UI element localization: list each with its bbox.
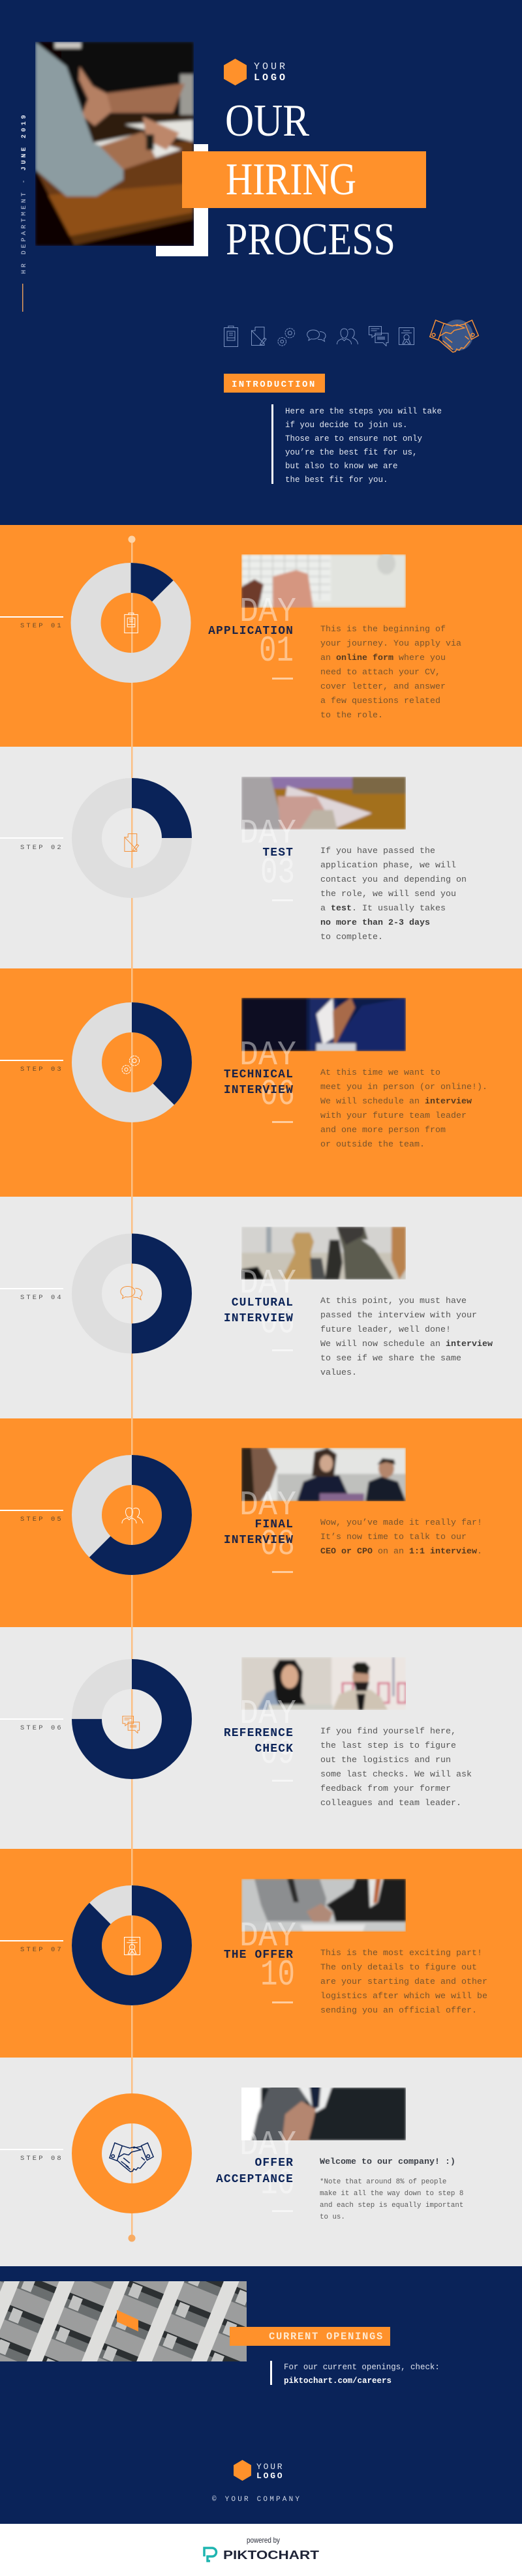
step 2 text: If you have passed the [320, 846, 435, 856]
title: PROCESS [226, 215, 395, 265]
step 5 text: Wow, you’ve made it really far! [320, 1518, 482, 1528]
step 2 donut: two eighths [87, 793, 177, 883]
introduction text [271, 404, 447, 485]
step 3 day count [239, 1036, 296, 1123]
step 7 heading: THE OFFER [224, 1949, 294, 1962]
copyright: © YOUR COMPANY [212, 2496, 301, 2504]
step 2 text: to complete. [320, 933, 383, 942]
step 2 day count: 03 [260, 852, 295, 893]
step 1 text: your journey. You apply via [320, 639, 461, 649]
step 4 text: values. [320, 1368, 357, 1378]
step 8 day count: DAY [239, 2125, 296, 2164]
step 1 text: a few questions related [320, 696, 440, 706]
step 2 photo: writing a test [241, 777, 406, 830]
title [225, 96, 395, 265]
step 4 [0, 1227, 493, 1378]
footer logo: LOGO [256, 2471, 284, 2481]
introduction text: Here are the steps you will take [285, 407, 442, 416]
step 8 label [0, 2149, 63, 2163]
panel: powered by footer: PIKTOCHART [223, 2548, 320, 2562]
step 4 label [0, 1288, 63, 1302]
orange title band [182, 151, 426, 208]
step 7 label [0, 1940, 63, 1954]
step 4 photo: dog in a meeting [241, 1227, 406, 1280]
step 5 label [0, 1510, 63, 1523]
step 6 text: If you find yourself here, [320, 1727, 456, 1737]
step 2 text: no more than 2-3 days [320, 918, 430, 928]
step 8 heading: OFFER [254, 2157, 294, 2170]
step 2 label [0, 837, 63, 852]
step 2 heading: TEST [262, 846, 294, 860]
step 6 day count: 09 [260, 1732, 295, 1774]
step 5 photo: colleagues at a laptop [241, 1448, 406, 1501]
title: OUR [225, 96, 309, 146]
step 3 photo: business people in suits [241, 998, 406, 1051]
footer logo: YOUR [256, 2462, 284, 2472]
step 2 day count: DAY [239, 814, 296, 853]
step 3 label [0, 1060, 63, 1073]
footer photo: building facade [0, 2281, 247, 2361]
step 1 day count: 01 [259, 630, 294, 672]
step 4 text: to see if we share the same [320, 1354, 461, 1364]
icon: clipboard [125, 613, 138, 633]
icon: document and pencil [125, 833, 139, 852]
step 2 text: application phase, we will [320, 861, 456, 871]
step 5 donut: five eighths [87, 1470, 177, 1560]
step 6 day count [239, 1694, 296, 1782]
step 4 donut: four eighths [87, 1248, 177, 1338]
current openings text: piktochart.com/careers [284, 2376, 392, 2386]
step 8 label: STEP 08 [20, 2155, 63, 2163]
step 1 text: This is the beginning of [320, 625, 446, 635]
step 7 text: This is the most exciting part! [320, 1949, 482, 1958]
panel: footer background [0, 2266, 522, 2524]
step 2 label: STEP 02 [20, 844, 63, 852]
introduction text: if you decide to join us. [285, 421, 408, 430]
step 4 label: STEP 04 [20, 1294, 63, 1302]
step 1 text: to the role. [320, 711, 383, 721]
introduction text: you’re the best fit for us, [285, 448, 418, 457]
introduction text: the best fit for you. [285, 475, 388, 485]
current openings heading: CURRENT OPENINGS [269, 2331, 384, 2343]
step 8 donut: complete [87, 2108, 177, 2198]
section bands [0, 525, 522, 2266]
current openings heading [230, 2327, 390, 2346]
step 1 text: need to attach your CV, [320, 668, 440, 678]
step 3 text: We will schedule an interview [320, 1097, 472, 1107]
step 4 day count: DAY [239, 1264, 296, 1303]
step 3 day count: 06 [260, 1073, 295, 1115]
step 1 donut: one eighth [86, 578, 176, 668]
step 2 text: contact you and depending on [320, 875, 467, 885]
step 1 day count [239, 592, 296, 680]
step 3 donut: three eighths [87, 1017, 177, 1107]
step 8 day count [239, 2125, 296, 2212]
step 5 text: It’s now time to talk to our [320, 1533, 467, 1542]
step 7 photo: handshake over a table [241, 1879, 406, 1932]
panel: header background [0, 0, 522, 525]
step 5 day count [239, 1486, 296, 1573]
step 4 heading: INTERVIEW [224, 1312, 294, 1325]
step 2 day count [239, 814, 296, 901]
introduction heading: INTRODUCTION [232, 380, 316, 390]
step 7 [0, 1879, 487, 2016]
step 6 label [0, 1718, 63, 1732]
step 8 note: to us. [320, 2213, 345, 2221]
header logo [224, 59, 288, 85]
header logo: YOUR [254, 61, 288, 72]
icon: message boxes [123, 1716, 140, 1733]
step 4 heading: CULTURAL [232, 1296, 294, 1310]
step 2 [0, 777, 467, 942]
step 8 heading: ACCEPTANCE [216, 2173, 294, 2186]
icon row: the eight steps [224, 320, 478, 352]
step 6 text: the last step is to figure [320, 1741, 456, 1751]
step 4 text: future leader, well done! [320, 1325, 451, 1335]
step 4 text: passed the interview with your [320, 1311, 477, 1321]
introduction text: but also to know we are [285, 462, 398, 471]
step 1 label [0, 616, 63, 630]
white frame behind photo [156, 144, 208, 256]
step 2 text: a test. It usually takes [320, 904, 446, 914]
current openings text [270, 2361, 440, 2386]
step 1 label: STEP 01 [20, 622, 63, 630]
header photo: meeting at a table [35, 42, 194, 246]
step 7 donut: seven eighths [87, 1900, 177, 1990]
step 3 day count: DAY [239, 1036, 296, 1075]
step 3 text: or outside the team. [320, 1140, 425, 1150]
icon: two people [122, 1508, 143, 1523]
panel: powered by footer: powered by [247, 2536, 280, 2545]
step 7 day count: 10 [260, 1954, 295, 1996]
step 7 text: The only details to figure out [320, 1963, 477, 1973]
step 3 [0, 998, 487, 1150]
step 6 text: out the logistics and run [320, 1756, 451, 1765]
step 3 text: meet you in person (or online!). [320, 1083, 487, 1092]
step 3 text: At this time we want to [320, 1068, 440, 1078]
introduction heading [224, 374, 325, 393]
step 5 text: CEO or CPO on an 1:1 interview. [320, 1547, 482, 1557]
step 6 photo: two colleagues [241, 1657, 406, 1710]
step 7 label: STEP 07 [20, 1946, 63, 1954]
step 4 day count: 06 [260, 1302, 295, 1343]
step 4 day count [239, 1264, 296, 1351]
step 1 photo: hands on keyboard [241, 554, 406, 608]
step 8 photo: adjusting a tie [241, 2088, 406, 2140]
icon: certificate [125, 1937, 140, 1955]
footer logo [234, 2460, 284, 2481]
step 7 text: logistics after which we will be [320, 1992, 487, 2001]
icon: chat bubbles [121, 1286, 142, 1300]
step 1 day count: DAY [239, 592, 296, 631]
step 6 text: feedback from your former [320, 1784, 451, 1794]
step 5 label: STEP 05 [20, 1516, 63, 1523]
step 5 heading: INTERVIEW [224, 1534, 294, 1547]
current openings text: For our current openings, check: [284, 2363, 440, 2372]
vertical date label: HR DEPARTMENT - JUNE 2019 [21, 112, 28, 274]
step 6 donut: six eighths [87, 1674, 177, 1764]
introduction text: Those are to ensure not only [285, 434, 423, 443]
step 5 heading: FINAL [254, 1518, 294, 1531]
step 8 note: make it all the way down to step 8 [320, 2190, 463, 2198]
step 8 note: *Note that around 8% of people [320, 2178, 446, 2186]
step 8 note: and each step is equally important [320, 2202, 463, 2209]
step 7 day count: DAY [239, 1917, 296, 1956]
step 6 day count: DAY [239, 1694, 296, 1733]
step 7 text: are your starting date and other [320, 1977, 487, 1987]
step 3 label: STEP 03 [20, 1066, 63, 1073]
step 6 heading: REFERENCE [224, 1727, 294, 1740]
step 1 text: an online form where you [320, 653, 446, 663]
step 8 welcome line: Welcome to our company! :) [320, 2157, 455, 2167]
step 4 text: At this point, you must have [320, 1296, 467, 1306]
step 8 day count: 10 [260, 2163, 295, 2204]
timeline line with end dots [128, 536, 136, 2242]
step 3 text: and one more person from [320, 1126, 446, 1135]
panel: powered by footer [0, 2524, 522, 2576]
step 4 text: We will now schedule an interview [320, 1340, 493, 1349]
step 3 text: with your future team leader [320, 1111, 467, 1121]
icon: gears [122, 1056, 140, 1073]
step 3 heading: INTERVIEW [224, 1084, 294, 1097]
step 3 heading: TECHNICAL [224, 1068, 294, 1081]
step 5 [0, 1448, 482, 1573]
step 1 [0, 552, 461, 721]
step 6 text: colleagues and team leader. [320, 1799, 461, 1808]
step 1 text: cover letter, and answer [320, 682, 446, 692]
step 1 heading: APPLICATION [208, 625, 294, 638]
step 5 day count: 08 [260, 1523, 295, 1565]
title: HIRING [226, 155, 356, 205]
step 2 text: the role, we will send you [320, 890, 456, 899]
step 6 label: STEP 06 [20, 1724, 63, 1732]
step 7 text: sending you an official offer. [320, 2006, 477, 2016]
header logo: LOGO [254, 72, 288, 83]
step 6 text: some last checks. We will ask [320, 1770, 472, 1780]
step 6 [0, 1657, 472, 1808]
step 6 heading: CHECK [254, 1743, 294, 1756]
icon: handshake [110, 2143, 153, 2172]
step 8 [0, 2084, 463, 2221]
step 7 day count [239, 1917, 296, 2003]
step 5 day count: DAY [239, 1486, 296, 1525]
